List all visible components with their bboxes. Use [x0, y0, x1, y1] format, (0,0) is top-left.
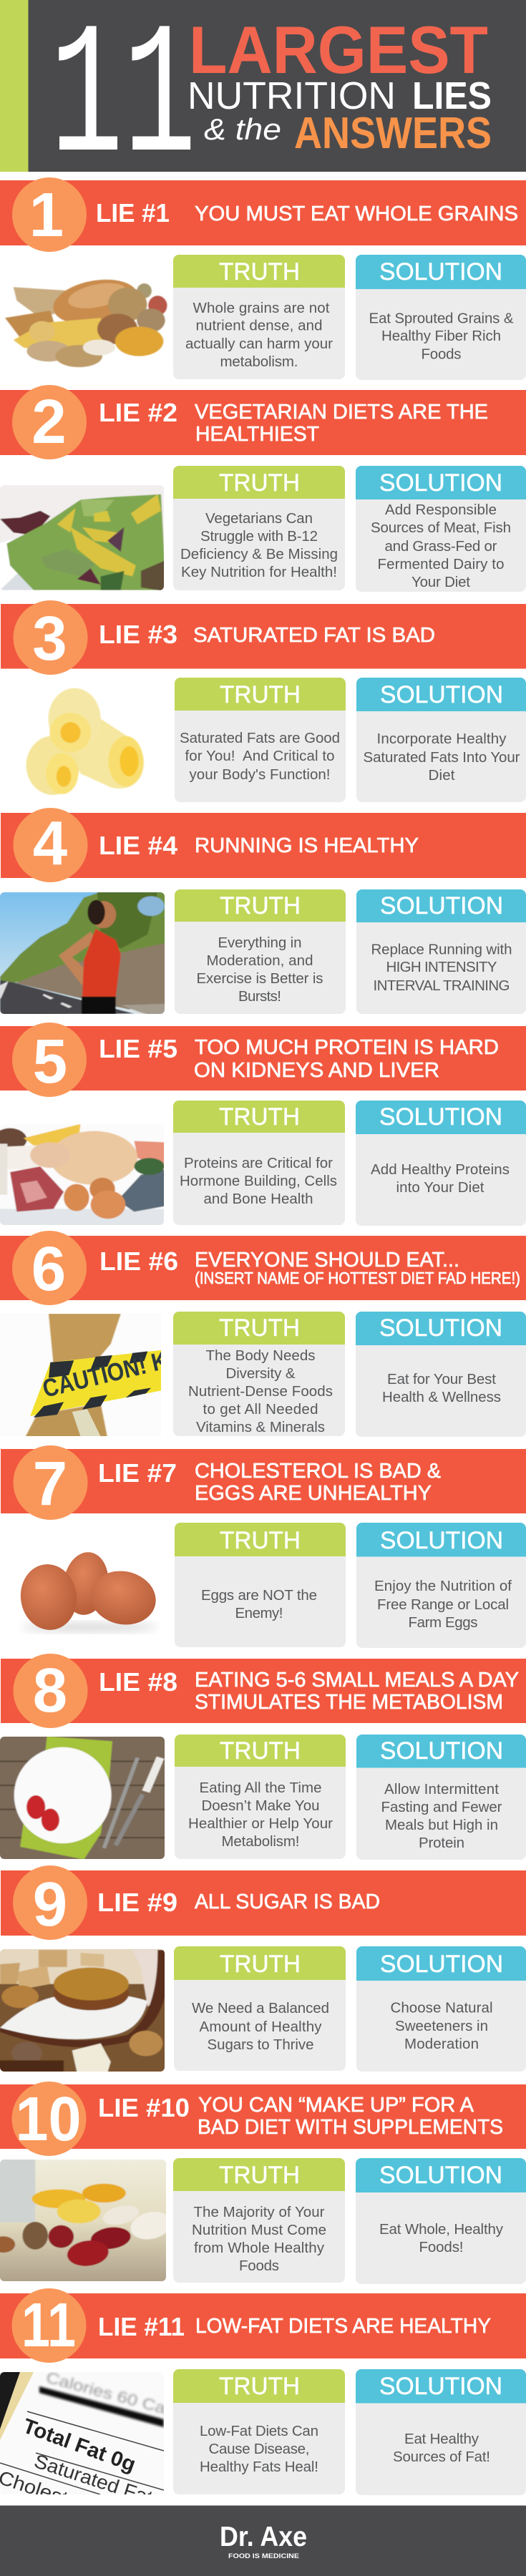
- panel: lie 1: [0, 177, 526, 380]
- solution text: Moderation: [404, 2036, 479, 2052]
- lie statement: [195, 1249, 520, 1287]
- truth card: [173, 1312, 345, 1436]
- solution card: [356, 2158, 526, 2284]
- solution heading: SOLUTION: [379, 2373, 502, 2400]
- solution text: Your Diet: [411, 574, 470, 590]
- truth text: [185, 300, 333, 370]
- solution text: Fermented Dairy to: [378, 556, 504, 572]
- banner: lie 9: [1, 1865, 526, 1940]
- truth heading: TRUTH: [220, 1951, 301, 1978]
- solution text: Fasting and Fewer: [381, 1799, 502, 1815]
- photo: brown eggs: [16, 1549, 161, 1634]
- solution heading: SOLUTION: [380, 1737, 503, 1765]
- truth text: Sugars to Thrive: [208, 2036, 313, 2053]
- photo: butter curls: [26, 688, 144, 795]
- solution text: [381, 1781, 502, 1851]
- truth card: [173, 1101, 345, 1225]
- truth text: Struggle with B-12: [200, 528, 318, 545]
- truth card: [175, 1735, 346, 1859]
- truth text: Saturated Fats are Good: [180, 730, 340, 746]
- heading: ANSWERS: ANSWERS: [294, 109, 492, 158]
- number 2: 2: [31, 387, 67, 457]
- photo: grains and bread: [5, 272, 167, 367]
- truth text: actually can harm your: [185, 336, 333, 352]
- truth text: Nutrient-Dense Foods: [188, 1383, 333, 1400]
- tagline: FOOD IS MEDICINE: [228, 2552, 299, 2560]
- lie label: LIE #11: [98, 2312, 185, 2341]
- truth text: Diversity &: [226, 1365, 296, 1382]
- solution text: Farm Eggs: [408, 1614, 478, 1631]
- solution text: [371, 502, 511, 590]
- banner: lie 8: [1, 1654, 526, 1728]
- label text: calories: Calories 60 Ca: [44, 2368, 168, 2418]
- heading numeral: 11: 11: [50, 0, 196, 206]
- solution text: Eat Healthy: [404, 2431, 479, 2447]
- banner: lie 6: [0, 1231, 526, 1305]
- solution card: [356, 255, 526, 380]
- truth text: [180, 730, 340, 783]
- truth text: for You! And Critical to: [185, 748, 335, 764]
- banner: lie 10: [0, 2082, 526, 2156]
- truth text: Cause Disease,: [209, 2441, 309, 2457]
- panel: lie 6: [0, 1231, 526, 1438]
- heading: LIES: LIES: [412, 74, 492, 117]
- number 3: 3: [32, 604, 67, 673]
- truth card: [173, 2369, 345, 2494]
- lie statement: [195, 1669, 519, 1714]
- number 1: 1: [29, 180, 64, 250]
- solution text: Meals but High in: [385, 1817, 498, 1833]
- banner: lie 11: [0, 2288, 526, 2363]
- solution text: [382, 1371, 501, 1405]
- number 10: 10: [16, 2084, 82, 2154]
- solution card: [356, 2369, 526, 2495]
- truth text: Vegetarians Can: [205, 510, 313, 527]
- truth text: to get All Needed: [203, 1401, 318, 1418]
- lie statement: ALL SUGAR IS BAD: [195, 1890, 380, 1913]
- solution text: Health & Wellness: [382, 1389, 501, 1405]
- solution text: Foods: [421, 346, 461, 362]
- truth text: nutrient dense, and: [196, 318, 322, 333]
- truth text: metabolism.: [220, 353, 298, 370]
- truth text: Proteins are Critical for: [184, 1155, 333, 1171]
- truth text: We Need a Balanced: [192, 2000, 329, 2016]
- solution text: Diet: [428, 767, 455, 784]
- lie statement: [194, 1036, 499, 1082]
- lie statement: ON KIDNEYS AND LIVER: [194, 1059, 439, 1082]
- panel: lie 4: [0, 808, 526, 1015]
- truth heading: TRUTH: [219, 2162, 300, 2189]
- photo: salad: [0, 483, 167, 595]
- solution text: Choose Natural: [391, 1999, 492, 2016]
- panel: lie 7: [1, 1445, 526, 1648]
- lie label: LIE #1: [96, 198, 170, 228]
- solution text: Sources of Meat, Fish: [371, 519, 511, 536]
- solution text: [379, 2221, 504, 2255]
- solution text: Sources of Fat!: [393, 2449, 490, 2465]
- solution heading: SOLUTION: [380, 892, 503, 919]
- number 5: 5: [33, 1027, 67, 1096]
- solution text: [371, 1161, 510, 1196]
- number 7: 7: [33, 1449, 67, 1518]
- solution text: Add Responsible: [385, 502, 497, 518]
- lie statement: YOU CAN “MAKE UP” FOR A: [198, 2094, 474, 2117]
- truth text: Doesn’t Make You: [202, 1797, 319, 1814]
- truth text: Moderation, and: [206, 952, 313, 969]
- truth text: [200, 2423, 318, 2475]
- number 11: 11: [21, 2290, 76, 2360]
- photo: nutrition label: [0, 2372, 164, 2494]
- solution heading: SOLUTION: [379, 258, 502, 286]
- number 8: 8: [33, 1656, 67, 1725]
- lie label: LIE #4: [99, 831, 177, 860]
- truth text: Key Nutrition for Health!: [181, 564, 337, 580]
- truth text: Amount of Healthy: [199, 2019, 322, 2035]
- banner: lie 1: [0, 177, 526, 252]
- solution card: [356, 1101, 526, 1226]
- heading: and the: & the: [204, 112, 281, 146]
- solution text: [391, 1999, 492, 2052]
- truth text: The Body Needs: [206, 1347, 315, 1364]
- panel: lie 10: [0, 2082, 526, 2284]
- truth text: Healthier or Help Your: [188, 1815, 333, 1832]
- truth text: Exercise is Better is: [196, 970, 323, 987]
- solution card: [356, 889, 526, 1014]
- solution text: HIGH INTENSITY: [386, 959, 497, 975]
- truth text: [180, 1155, 337, 1207]
- lie statement: YOU MUST EAT WHOLE GRAINS: [195, 203, 518, 225]
- solution text: Foods!: [419, 2239, 464, 2255]
- truth heading: TRUTH: [219, 1103, 300, 1131]
- lie statement: EVERYONE SHOULD EAT...: [195, 1249, 459, 1272]
- panel: lie 3: [1, 600, 526, 802]
- solution card: [356, 1946, 526, 2072]
- truth text: Nutrition Must Come: [192, 2222, 326, 2238]
- banner: lie 5: [0, 1023, 526, 1097]
- solution text: Enjoy the Nutrition of: [374, 1578, 512, 1594]
- solution text: Eat Sprouted Grains &: [369, 311, 514, 326]
- lie label: LIE #9: [97, 1888, 177, 1917]
- lie statement: EATING 5-6 SMALL MEALS A DAY: [195, 1669, 519, 1692]
- footer: [0, 2506, 526, 2576]
- truth text: Enemy!: [235, 1605, 283, 1621]
- lie label: LIE #7: [98, 1458, 177, 1488]
- truth text: Foods: [239, 2258, 279, 2274]
- panel: lie 2: [0, 385, 526, 595]
- number 4: 4: [33, 809, 67, 878]
- solution text: Add Healthy Proteins: [371, 1161, 510, 1178]
- lie statement: LOW-FAT DIETS ARE HEALTHY: [195, 2315, 491, 2338]
- solution text: [374, 1578, 512, 1631]
- lie label: LIE #2: [99, 398, 177, 427]
- lie statement: STIMULATES THE METABOLISM: [195, 1691, 503, 1714]
- truth text: Eggs are NOT the: [201, 1587, 317, 1604]
- number 6: 6: [31, 1234, 66, 1304]
- truth card: [175, 678, 346, 802]
- truth text: [192, 2000, 329, 2053]
- truth heading: TRUTH: [220, 1527, 301, 1554]
- truth card: [174, 1946, 346, 2071]
- truth text: Vitamins & Minerals: [196, 1419, 325, 1435]
- truth text: Everything in: [218, 935, 302, 951]
- truth text: and Bone Health: [203, 1191, 313, 1207]
- solution text: and Grass-Fed or: [385, 538, 497, 555]
- truth text: Hormone Building, Cells: [180, 1173, 337, 1189]
- solution heading: SOLUTION: [379, 2162, 502, 2189]
- solution heading: SOLUTION: [379, 469, 502, 497]
- truth heading: TRUTH: [220, 892, 301, 919]
- banner: lie 2: [0, 385, 526, 459]
- truth text: your Body's Function!: [189, 766, 331, 783]
- label text: total fat: Total Fat 0g: [20, 2415, 139, 2477]
- solution text: [369, 311, 514, 362]
- truth text: [188, 1780, 333, 1850]
- solution card: [356, 466, 526, 592]
- solution text: Allow Intermittent: [384, 1781, 499, 1797]
- truth text: [188, 1347, 333, 1435]
- truth heading: TRUTH: [219, 2373, 300, 2400]
- solution card: [356, 1523, 526, 1648]
- lie statement: EGGS ARE UNHEALTHY: [195, 1482, 432, 1505]
- solution text: Replace Running with: [371, 942, 512, 957]
- truth text: Deficiency & Be Missing: [180, 546, 338, 562]
- solution card: [356, 1735, 526, 1860]
- lie statement: BAD DIET WITH SUPPLEMENTS: [198, 2116, 503, 2139]
- lie label: LIE #10: [98, 2093, 190, 2122]
- photo: empty plate: [0, 1735, 167, 1861]
- panel: lie 11: [0, 2288, 526, 2509]
- truth text: Metabolism!: [222, 1833, 299, 1850]
- lie label: LIE #3: [99, 620, 177, 649]
- solution text: Eat Whole, Healthy: [379, 2221, 504, 2238]
- solution text: Free Range or Local: [377, 1596, 509, 1613]
- truth heading: TRUTH: [219, 469, 300, 497]
- solution text: [371, 942, 512, 994]
- number 9: 9: [33, 1870, 67, 1939]
- truth card: [175, 889, 346, 1014]
- truth text: from Whole Healthy: [194, 2240, 325, 2256]
- lie statement: [195, 401, 488, 446]
- solution text: INTERVAL TRAINING: [374, 977, 510, 994]
- solution heading: SOLUTION: [380, 1951, 503, 1978]
- solution heading: SOLUTION: [379, 1314, 502, 1342]
- banner: lie 3: [1, 600, 526, 675]
- truth text: Eating All the Time: [199, 1780, 322, 1796]
- truth text: Low-Fat Diets Can: [200, 2423, 318, 2439]
- solution heading: SOLUTION: [380, 681, 503, 708]
- truth heading: TRUTH: [219, 258, 300, 286]
- solution text: [364, 731, 520, 784]
- solution text: [393, 2431, 490, 2465]
- heading: NUTRITION: NUTRITION: [187, 74, 396, 117]
- lie statement: RUNNING IS HEALTHY: [195, 834, 419, 857]
- lie statement: TOO MUCH PROTEIN IS HARD: [195, 1036, 499, 1059]
- photo: supplements: [0, 2158, 175, 2284]
- photo: protein foods: [0, 1121, 167, 1227]
- banner: lie 4: [1, 808, 526, 882]
- truth card: [173, 466, 345, 590]
- label text: saturated fat: Saturated Fat: [31, 2450, 155, 2509]
- header panel: [0, 0, 526, 206]
- truth text: [192, 2204, 326, 2274]
- truth text: [180, 510, 338, 580]
- truth text: Whole grains are not: [193, 300, 330, 316]
- logo: Dr. Axe: Dr. Axe: [220, 2522, 307, 2552]
- truth text: [201, 1587, 317, 1621]
- truth heading: TRUTH: [219, 1314, 300, 1342]
- solution text: Protein: [419, 1835, 464, 1851]
- lie label: LIE #8: [99, 1667, 177, 1697]
- truth text: Healthy Fats Heal!: [200, 2459, 318, 2475]
- solution card: [356, 1312, 526, 1437]
- solution text: Saturated Fats Into Your: [364, 749, 520, 766]
- solution heading: SOLUTION: [380, 1527, 503, 1554]
- solution text: Healthy Fiber Rich: [381, 328, 501, 344]
- truth text: Bursts!: [238, 988, 281, 1005]
- truth text: The Majority of Your: [193, 2204, 325, 2220]
- solution text: Eat for Your Best: [387, 1371, 496, 1387]
- panel: lie 8: [0, 1654, 526, 1861]
- solution text: Sweeteners in: [395, 2018, 488, 2034]
- lie statement: HEALTHIEST: [195, 423, 319, 446]
- solution text: into Your Diet: [396, 1179, 484, 1196]
- heading: LARGEST: LARGEST: [189, 12, 488, 87]
- banner: lie 7: [1, 1445, 526, 1520]
- solution heading: SOLUTION: [379, 1103, 502, 1131]
- truth text: [196, 935, 323, 1005]
- truth heading: TRUTH: [220, 1737, 301, 1765]
- panel: lie 9: [0, 1865, 526, 2073]
- truth card: [173, 2158, 345, 2283]
- lie statement: [195, 1460, 441, 1505]
- lie label: LIE #6: [99, 1246, 178, 1276]
- lie statement: [198, 2094, 503, 2139]
- photo: sugar spoon: [0, 1947, 167, 2073]
- photo: tired runner: [0, 891, 167, 1015]
- solution text: Incorporate Healthy: [376, 731, 507, 747]
- truth card: [175, 1523, 346, 1647]
- lie statement: SATURATED FAT IS BAD: [193, 624, 435, 647]
- lie statement: CHOLESTEROL IS BAD &: [195, 1460, 441, 1483]
- solution card: [356, 678, 526, 802]
- truth card: [173, 255, 345, 379]
- lie label: LIE #5: [99, 1034, 177, 1063]
- photo: wheat with caution tape: [24, 1314, 161, 1436]
- lie statement: VEGETARIAN DIETS ARE THE: [195, 401, 488, 424]
- truth heading: TRUTH: [220, 681, 301, 708]
- tape lettering: CAUTION! K: [40, 1346, 170, 1403]
- panel: lie 5: [0, 1023, 526, 1227]
